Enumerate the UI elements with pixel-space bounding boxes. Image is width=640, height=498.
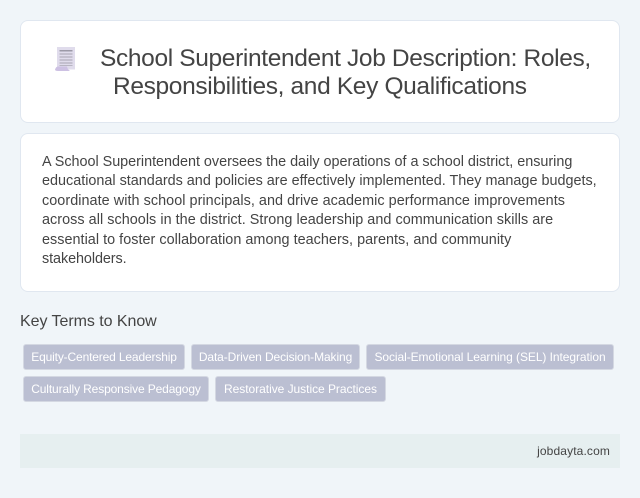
tag: Social-Emotional Learning (SEL) Integration (374, 350, 606, 364)
description text: educational standards and policies are effectively implemented. They manage budgets, (42, 173, 597, 189)
title line 2: Responsibilities, and Key Qualifications (113, 73, 527, 100)
tag: Data-Driven Decision-Making (199, 350, 352, 364)
tag: Restorative Justice Practices (224, 382, 377, 396)
description text: essential to foster collaboration among teachers, parents, and community (42, 232, 511, 248)
tag (191, 344, 360, 370)
tag: Culturally Responsive Pedagogy (31, 382, 201, 396)
icon: document scroll (55, 47, 75, 71)
description text: coordinate with school principals, and drive academic performance improvements (42, 193, 565, 209)
tag (366, 344, 614, 370)
footer text: jobdayta.com (537, 444, 610, 458)
title line 1: School Superintendent Job Description: Roles, (100, 45, 591, 72)
description text (42, 154, 597, 267)
heading: key terms: Key Terms to Know (20, 313, 157, 330)
tag: Equity-Centered Leadership (31, 350, 177, 364)
tag (215, 376, 386, 402)
tag group (23, 344, 614, 402)
panel: description card (20, 133, 620, 292)
tag (23, 344, 185, 370)
description text: A School Superintendent oversees the daily operations of a school district, ensuring (42, 154, 572, 170)
tag (23, 376, 209, 402)
footer bar (20, 434, 620, 468)
description text: stakeholders. (42, 251, 127, 267)
description text: across all schools in the district. Strong leadership and communication skills are (42, 212, 553, 228)
panel: title card (20, 20, 620, 123)
